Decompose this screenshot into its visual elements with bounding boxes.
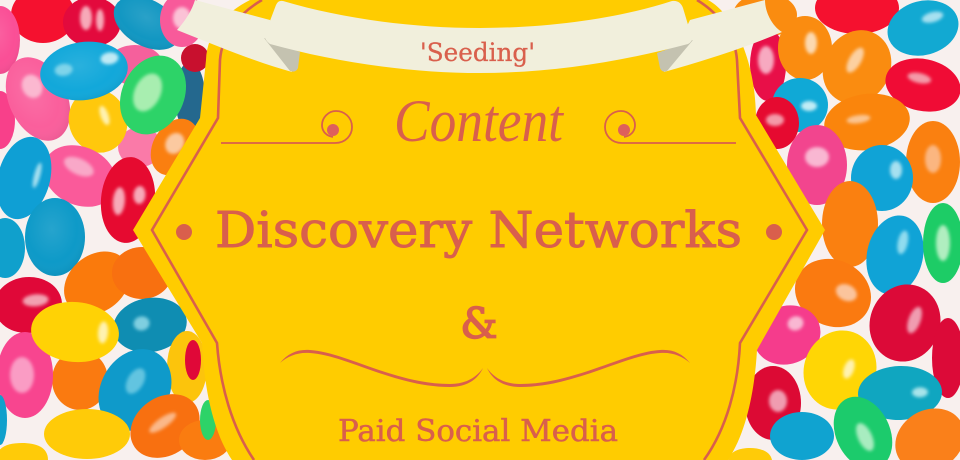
flourish: moustache divider [280, 350, 690, 387]
bullet: right dot [766, 224, 782, 240]
flourish: left swirl [221, 111, 352, 143]
heading: Discovery Networks: Discovery Networks [215, 201, 742, 259]
ribbon left tail [177, 0, 300, 72]
bullet: left dot [176, 224, 192, 240]
heading: Paid Social Media: Paid Social Media [338, 414, 618, 449]
ribbon right tail [657, 0, 782, 72]
ampersand: & [460, 299, 498, 348]
panel: yellow badge [133, 0, 825, 460]
heading: Content: Content [394, 88, 564, 154]
flourish: right swirl [605, 111, 736, 143]
ribbon main band [265, 1, 692, 73]
heading: Seeding: 'Seeding' [420, 38, 535, 67]
